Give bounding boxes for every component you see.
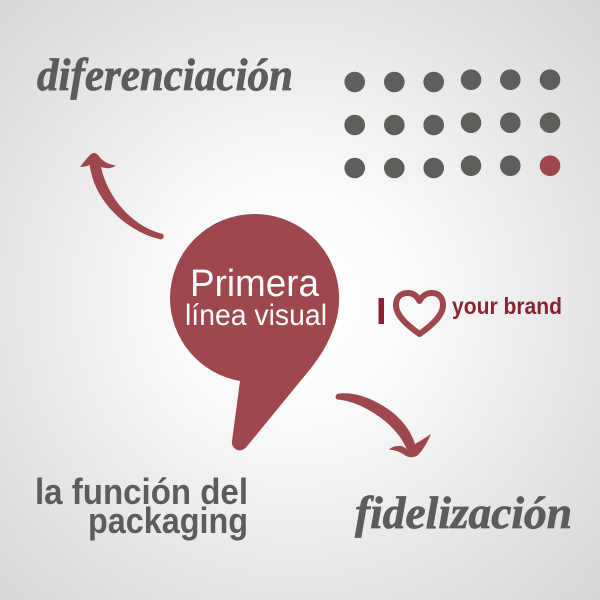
speech bubble with title [170,214,339,450]
arrow: up-left toward diferenciación [80,153,164,240]
title: Primera: Primera [190,263,320,305]
heading: la función del packaging [35,471,248,541]
letter I bar [378,298,384,324]
arrow: down-right toward fidelización [336,393,431,457]
heading: diferenciación: diferenciación [37,49,293,100]
heading: fidelización: fidelización [355,487,572,538]
heading: la función del packaging: packaging [88,500,248,541]
text: your brand: your brand [452,293,562,319]
icon: heart [396,293,443,334]
dot grid [344,69,560,178]
heading: la función del packaging: la función del [35,471,248,512]
subtitle: línea visual: línea visual [185,299,327,332]
logo: I love your brand [378,293,562,334]
